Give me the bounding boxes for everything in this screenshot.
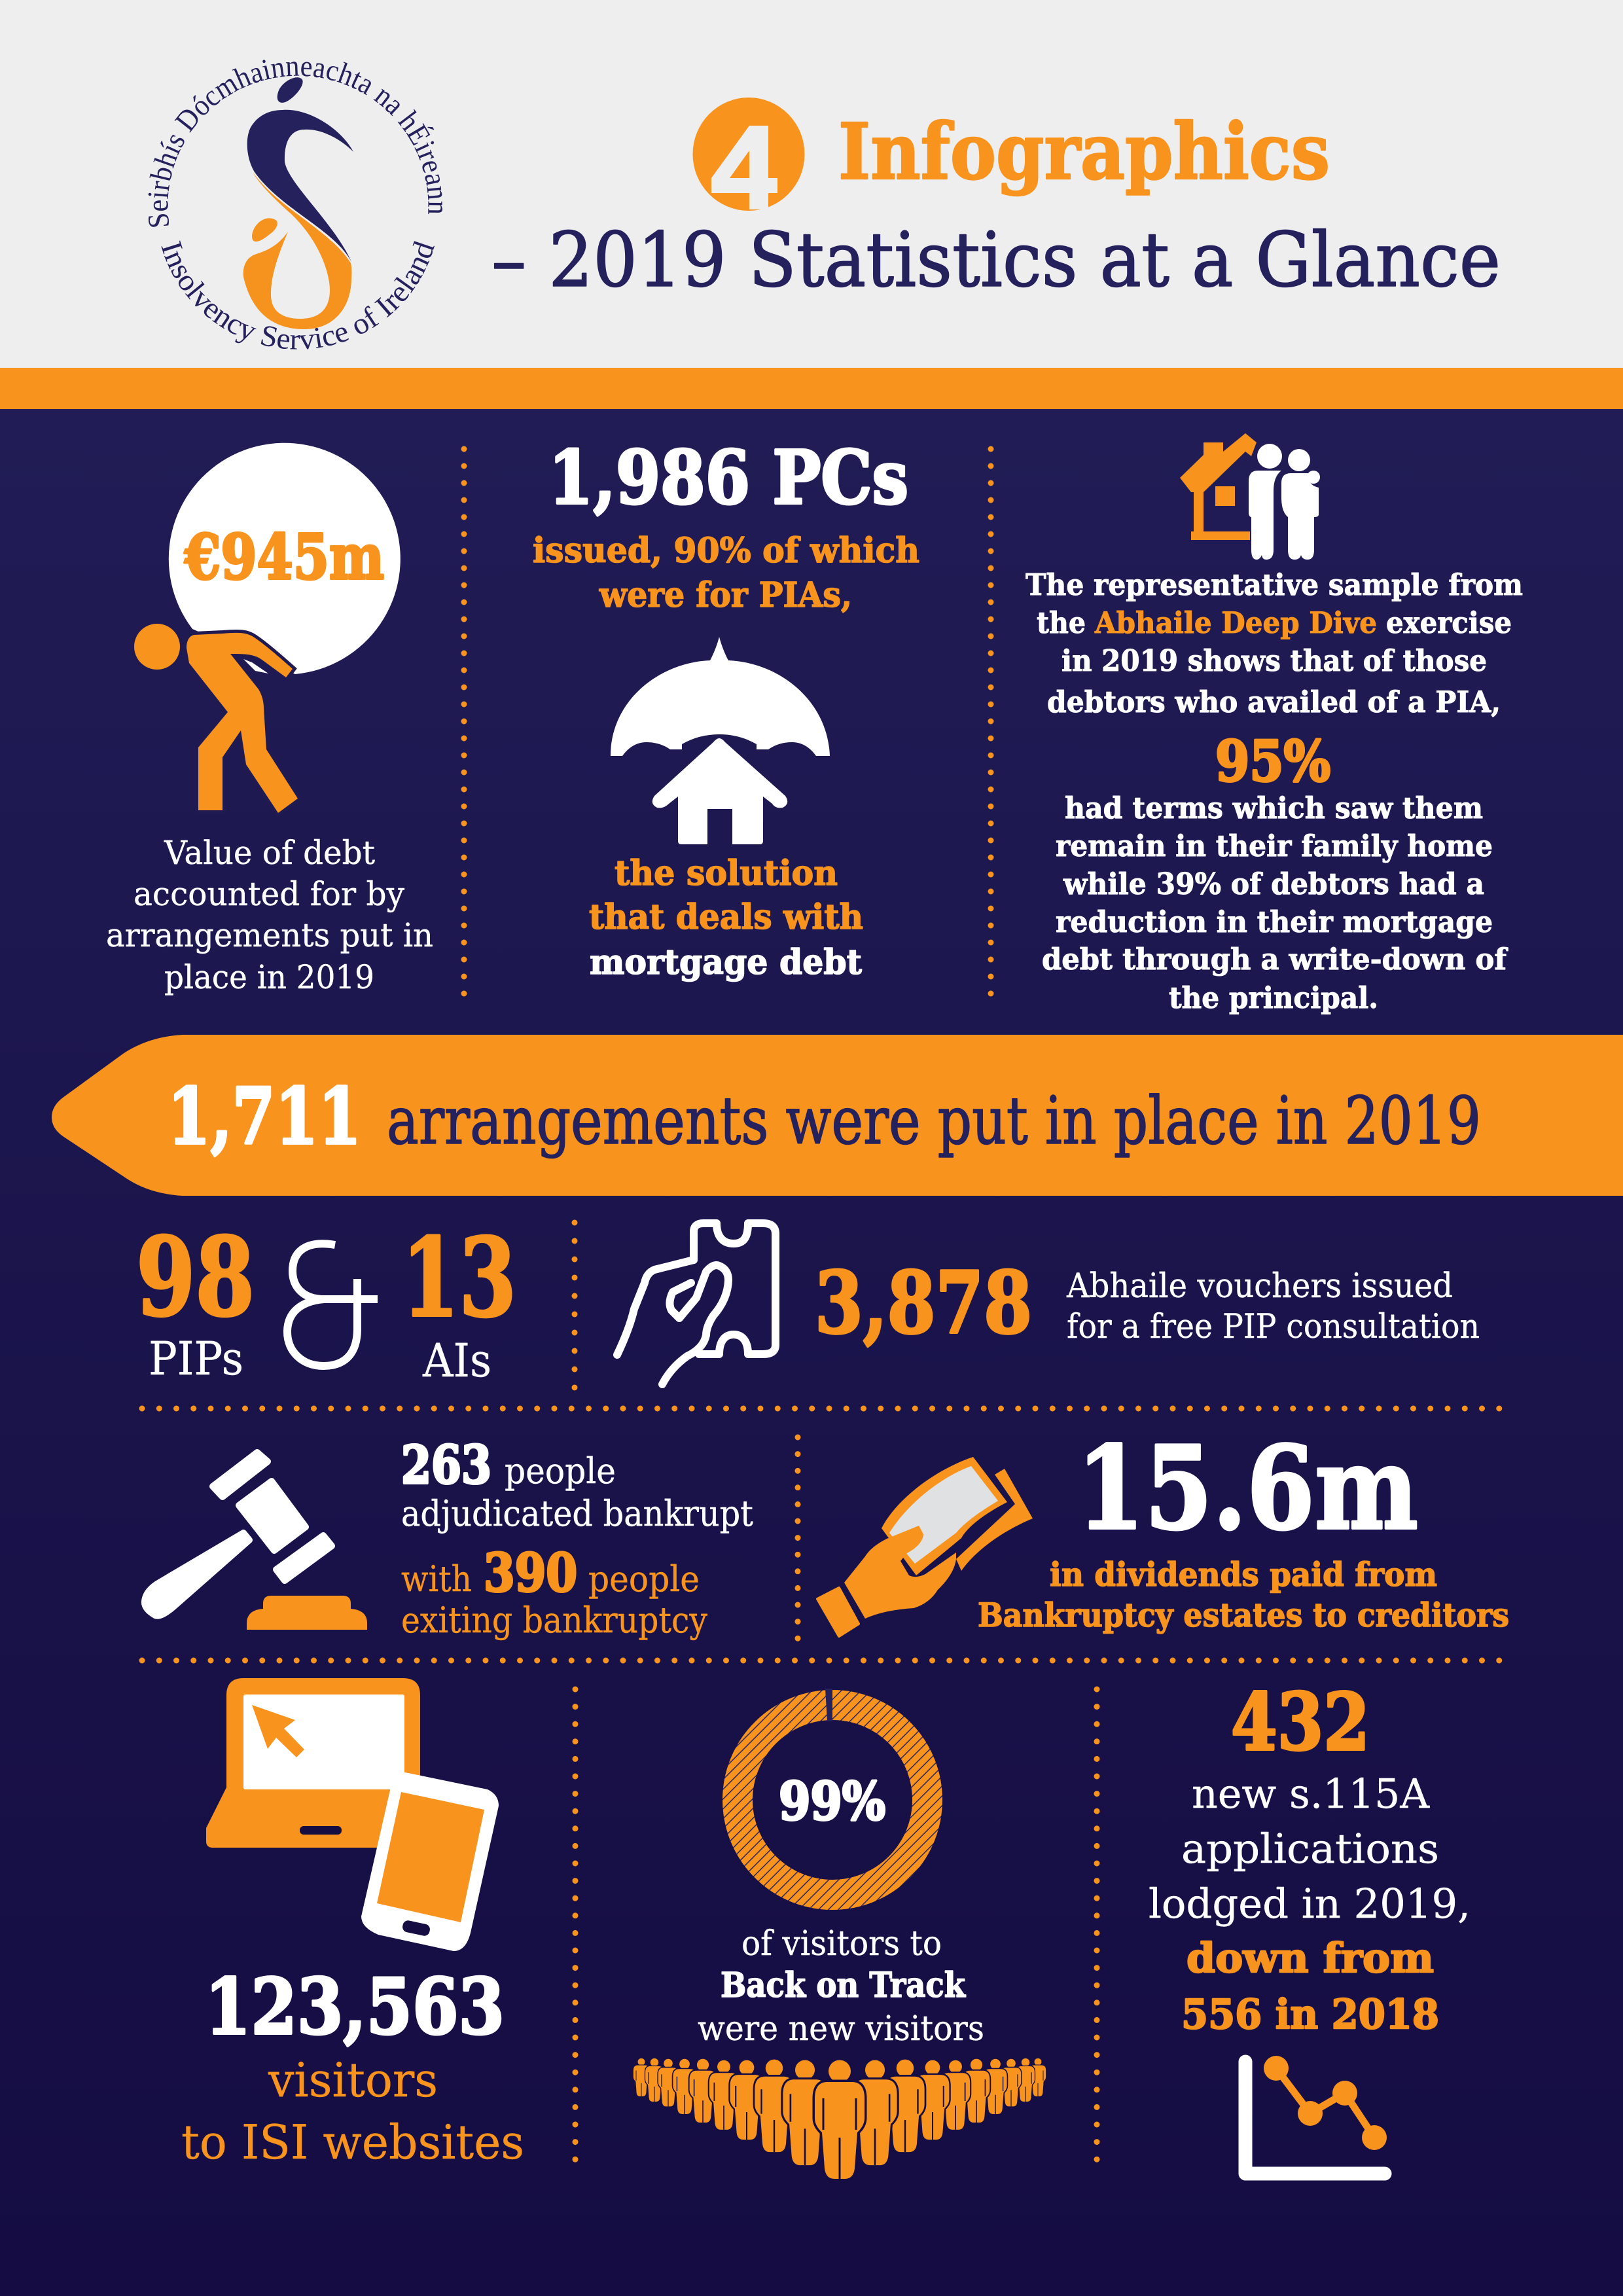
icon: crowd of people bbox=[633, 2058, 1046, 2179]
text: issued, 90% of which were for PIAs: issued, 90% of which bbox=[533, 531, 919, 571]
panel: value of debt bbox=[106, 443, 433, 996]
text: with 390 people exiting bankruptcy bbox=[401, 1542, 707, 1641]
divider dots 4 bbox=[142, 1406, 1501, 1411]
stat: 98 PIPs bbox=[136, 1213, 255, 1386]
text: dividends paid: Bankruptcy estates to creditors bbox=[978, 1596, 1509, 1634]
text: family home terms: the principal. bbox=[1169, 980, 1378, 1015]
text: dividends paid bbox=[978, 1555, 1509, 1634]
panel: s.115A applications bbox=[1149, 1676, 1471, 2174]
panel: Abhaile vouchers bbox=[617, 1223, 1480, 1384]
orange divider band bbox=[0, 368, 1623, 409]
text: new s.115A applications: applications bbox=[1181, 1825, 1439, 1873]
text: representative sample: in 2019 shows that of those bbox=[1061, 643, 1487, 678]
icon: person carrying load bbox=[134, 624, 298, 813]
text: family home terms: had terms which saw them bbox=[1065, 791, 1483, 825]
text: representative sample: Abhaile Deep Dive bbox=[1094, 605, 1377, 640]
chart: 99% donut bbox=[738, 1689, 927, 1895]
text: representative sample: The representative sample from bbox=[1026, 567, 1523, 602]
title bbox=[491, 98, 1501, 304]
text: with 390 people exiting bankruptcy: people bbox=[588, 1558, 700, 1600]
divider dots 1 bbox=[461, 449, 467, 995]
text: of visitors to Back on Track bbox=[698, 1924, 984, 2049]
text: with 390 people exiting bankruptcy: exiting bankruptcy bbox=[401, 1600, 707, 1641]
panel: PIPs and AIs bbox=[136, 1213, 516, 1388]
text: with 390 people exiting bankruptcy: 390 bbox=[484, 1542, 577, 1604]
stat: 123,563: 123,563 bbox=[205, 1962, 505, 2052]
panel: new visitors bbox=[633, 1689, 1046, 2179]
divider dots 3 bbox=[572, 1223, 577, 1389]
text: the solution that deals with mortgage debt: mortgage debt bbox=[590, 942, 862, 982]
panel: Abhaile Deep Dive bbox=[1026, 433, 1523, 1015]
stat: 98 PIPs: PIPs bbox=[149, 1332, 243, 1386]
text: the solution that deals with mortgage debt bbox=[589, 853, 863, 982]
heading: 2019 Statistics at a Glance: – 2019 Statistics at a Glance bbox=[491, 217, 1501, 304]
stat: 432: 432 bbox=[1231, 1676, 1370, 1768]
text: issued, 90% of which were for PIAs bbox=[533, 531, 919, 615]
icon: hand holding voucher bbox=[617, 1223, 776, 1384]
panel: website visitors bbox=[181, 1678, 524, 2170]
stat: 13 AIs bbox=[402, 1214, 516, 1388]
text: value of debt caption bbox=[106, 834, 433, 996]
text: value of debt caption: accounted for by bbox=[134, 875, 405, 913]
stat: 1,986 PCs: 1,986 PCs bbox=[548, 435, 908, 521]
text: with 390 people exiting bankruptcy: with bbox=[401, 1558, 472, 1600]
text: down from 556 in 2018 bbox=[1181, 1934, 1439, 2038]
divider dots 6 bbox=[142, 1657, 1501, 1664]
stat: 13 AIs: AIs bbox=[422, 1334, 491, 1388]
icon: house and family bbox=[1180, 433, 1320, 560]
icon: hand with banknotes bbox=[817, 1457, 1033, 1636]
text: 263 people adjudicated bankrupt: adjudicated bankrupt bbox=[401, 1493, 753, 1534]
text: family home terms bbox=[1042, 791, 1508, 1015]
stat: 1,711: 1,711 bbox=[168, 1071, 361, 1162]
text: value of debt caption: arrangements put in bbox=[106, 916, 433, 954]
icon: number 4 badge bbox=[692, 98, 805, 211]
divider dots 5 bbox=[794, 1437, 801, 1640]
text: down from 556 in 2018: down from bbox=[1186, 1934, 1434, 1982]
text: representative sample bbox=[1026, 567, 1523, 719]
logo circular text: Insolvency Service of Ireland bbox=[161, 241, 435, 350]
text: value of debt caption: place in 2019 bbox=[164, 958, 374, 996]
text: visitors to ISI websites: visitors bbox=[268, 2053, 438, 2108]
icon: umbrella over house bbox=[611, 637, 830, 844]
text: new s.115A applications: lodged in 2019, bbox=[1149, 1880, 1471, 1928]
logo circular text: Seirbhís Dócmhainneachta na hÉireann bbox=[148, 60, 442, 227]
logo circular text bbox=[148, 60, 442, 350]
stat: 3,878: 3,878 bbox=[815, 1253, 1032, 1353]
text: of visitors to Back on Track: of visitors to bbox=[741, 1924, 942, 1964]
icon: ampersand bbox=[287, 1244, 378, 1366]
text: family home terms: while 39% of debtors had a bbox=[1063, 867, 1484, 901]
stat: €945m: €945m bbox=[184, 521, 384, 594]
stat: 13 AIs: 13 bbox=[402, 1214, 516, 1341]
icon: downward line chart bbox=[1245, 2056, 1387, 2174]
text: representative sample: exercise bbox=[1386, 605, 1512, 640]
text: 263 people adjudicated bankrupt: 263 bbox=[401, 1434, 491, 1496]
icon: white ball bbox=[169, 443, 401, 674]
stat: 95%: 95% bbox=[1215, 729, 1330, 795]
banner: 1,711 arrangements bbox=[52, 1035, 1623, 1196]
text: family home terms: remain in their family home bbox=[1056, 829, 1493, 863]
divider dots 7 bbox=[572, 1689, 579, 2161]
text: Abhaile vouchers issued: for a free PIP consultation bbox=[1067, 1308, 1480, 1346]
text: of visitors to Back on Track: were new visitors bbox=[698, 2009, 984, 2049]
stat: 98 PIPs: 98 bbox=[136, 1213, 255, 1340]
stat: 15.6m: 15.6m bbox=[1077, 1422, 1418, 1556]
text: representative sample: the bbox=[1037, 605, 1086, 640]
text: issued, 90% of which were for PIAs: were for PIAs, bbox=[599, 575, 852, 615]
panel: bankruptcy bbox=[145, 1434, 753, 1641]
logo figure bbox=[243, 77, 353, 329]
text: visitors to ISI websites bbox=[181, 2053, 524, 2170]
text: representative sample: debtors who availed of a PIA, bbox=[1047, 685, 1501, 719]
divider dots 2 bbox=[988, 449, 993, 995]
text: Abhaile vouchers issued: Abhaile vouchers issued bbox=[1066, 1267, 1453, 1306]
text: Abhaile vouchers issued bbox=[1066, 1267, 1480, 1346]
text: new s.115A applications bbox=[1149, 1770, 1471, 1928]
stat: 99%: 99% bbox=[779, 1770, 885, 1832]
icon: gavel bbox=[145, 1452, 367, 1630]
text: family home terms: reduction in their mortgage bbox=[1056, 905, 1493, 939]
panel: PCs issued bbox=[533, 435, 919, 982]
text: 263 people adjudicated bankrupt: people bbox=[505, 1450, 616, 1492]
text: dividends paid: in dividends paid from bbox=[1050, 1555, 1437, 1594]
text: of visitors to Back on Track: Back on Track bbox=[721, 1965, 966, 2005]
heading: Infographics: Infographics bbox=[838, 106, 1330, 197]
text: value of debt caption: Value of debt bbox=[164, 834, 375, 872]
text: visitors to ISI websites: to ISI websites bbox=[181, 2115, 524, 2170]
text: down from 556 in 2018: 556 in 2018 bbox=[1181, 1990, 1439, 2038]
divider dots 8 bbox=[1094, 1689, 1099, 2161]
text: the solution that deals with mortgage debt: the solution bbox=[615, 853, 838, 893]
text: family home terms: debt through a write-down of bbox=[1042, 942, 1508, 977]
header background bbox=[0, 0, 1623, 368]
panel: dividends bbox=[817, 1422, 1509, 1636]
text: new s.115A applications: new s.115A bbox=[1192, 1770, 1430, 1818]
icon: laptop and phone bbox=[206, 1678, 499, 1951]
text: the solution that deals with mortgage debt: that deals with bbox=[589, 897, 863, 937]
text: 263 people adjudicated bankrupt bbox=[401, 1434, 753, 1534]
logo: Insolvency Service of Ireland bbox=[148, 60, 442, 350]
